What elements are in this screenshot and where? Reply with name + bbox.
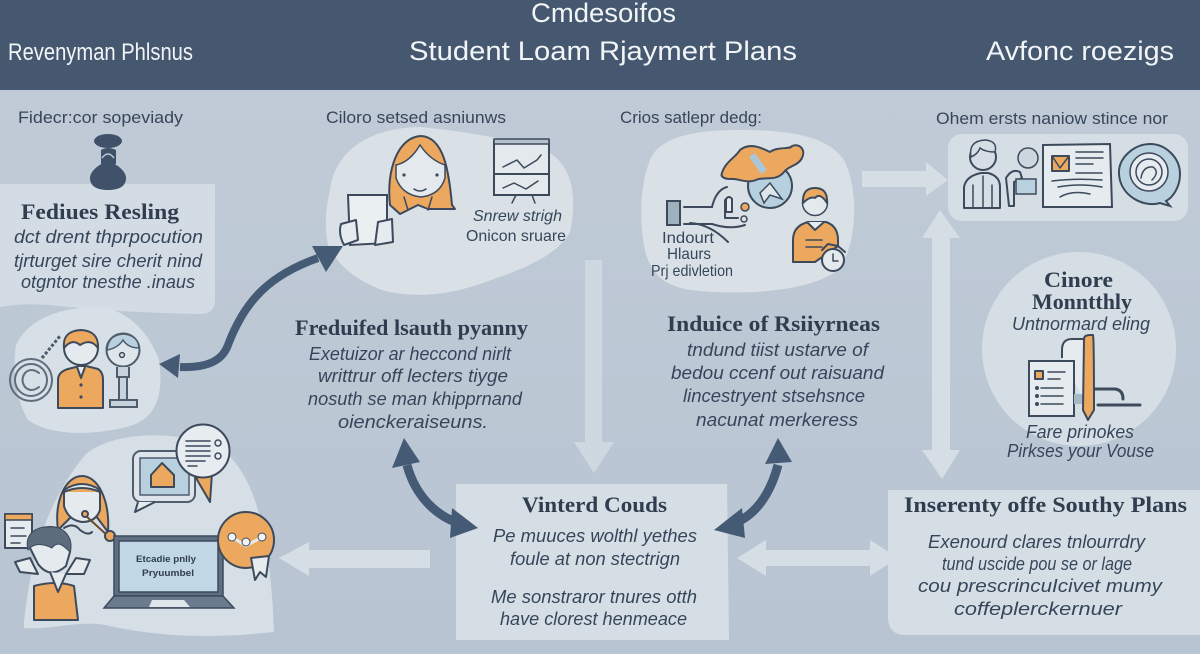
text block: Indourt Hlaurs: Hlaurs	[667, 246, 711, 263]
icon: orange cloud and globe	[722, 145, 803, 208]
text block: center-right body	[671, 340, 885, 430]
text block: bottom center body: Me sonstraror tnures otth	[491, 587, 697, 607]
icon: dark-haired stressed person	[15, 527, 90, 620]
icon: document with envelope	[1043, 144, 1112, 207]
panel: left top text card	[0, 184, 215, 314]
text block: Indourt Hlaurs: Indourt	[662, 230, 715, 247]
heading: Freduifed bauth pyanny: Freduifed lsauth pyanny	[295, 315, 528, 340]
text block: bottom center body	[491, 526, 697, 629]
header band	[0, 0, 1200, 90]
heading: Cinore Monthly: Cinore	[1044, 267, 1113, 292]
icon: orange badge with ribbon	[218, 512, 274, 580]
text: Fare prinokes: Pirkses your Vouse	[1007, 441, 1154, 461]
arrow: dark curved left	[159, 246, 343, 378]
text block: left card body: tjrturget sire cherit nind	[14, 251, 203, 271]
icon: laptop	[104, 536, 234, 608]
text block: center-right body: nacunat merkeress	[696, 410, 858, 430]
icon: woman with document	[340, 136, 455, 245]
icon: orange businessman	[58, 330, 103, 408]
text block: blob caption	[466, 208, 566, 245]
text block: center-right body: tndund tiist ustarve of	[687, 340, 870, 360]
text: laptop screen: Etcadie pnlly	[136, 554, 197, 565]
icon: presentation board chart	[494, 139, 549, 203]
arrow: light left from bottom card	[279, 542, 430, 576]
icon: copyright circle	[10, 336, 60, 401]
text block: center-left body: nosuth se man khipprnand	[308, 389, 523, 409]
text block: blob caption: Snrew strigh	[473, 208, 562, 225]
panel: circle Cinore Monthly	[982, 252, 1176, 461]
text block: bottom right body: coffeplerckernuer	[954, 599, 1123, 619]
heading: Fediues Resling: Fediues Resling	[21, 199, 179, 224]
panel: top middle speech blob	[326, 127, 573, 295]
text block: center-left body: writtrur off lecters tiyge	[318, 366, 508, 386]
header: right title: Avfonc roezigs	[986, 36, 1174, 66]
icon: checklist with pencil	[1029, 335, 1140, 420]
text block: left card body	[14, 227, 203, 292]
text block: bottom center body: have clorest henmeace	[500, 609, 687, 629]
icon: target speech bubble	[1119, 144, 1180, 206]
panel: top right-middle rounded card	[641, 130, 854, 292]
label: Ciloro setsed asniunws: Ciloro setsed asniunws	[326, 108, 506, 127]
arrow: light down center	[574, 260, 614, 473]
text block: bottom right body: cou prescrincuIcivet mumy	[918, 576, 1163, 596]
icon: dark person	[90, 134, 126, 190]
panel: bottom center card	[456, 484, 729, 640]
icon: woman with orange hair	[57, 476, 115, 541]
text block: center-left body: oienckeraiseuns.	[338, 412, 488, 432]
panel: left illustration blob with people	[10, 307, 160, 433]
icon: grey person on stand	[106, 334, 140, 407]
icon: orange man with clock	[793, 188, 845, 271]
heading: Induice of Rsiiyrneas: Induice of Rsiiyrneas	[667, 311, 880, 336]
text: laptop screen	[136, 554, 197, 579]
icon: second person with tablet	[1006, 148, 1038, 206]
icon: person with jacket	[964, 140, 1000, 208]
header: main title: Student Loam Rjaymert Plans	[409, 36, 797, 66]
icon: hand with thumb up	[667, 187, 749, 242]
text block: blob caption: Onicon sruare	[466, 228, 566, 245]
panel: bottom left illustration blob	[5, 424, 274, 636]
text block: bottom right body: tund uscide pou se or lage	[942, 554, 1132, 574]
text block: center-right body: lincestryent stsehsnce	[683, 386, 865, 406]
heading: Cinore Monthly	[1032, 267, 1132, 314]
arrow: light horizontal to top right card	[862, 162, 948, 196]
panel: bottom right card	[888, 490, 1200, 635]
text block: left card body: otgntor tnesthe .inaus	[21, 272, 195, 292]
panel: center text left	[295, 315, 528, 432]
text: Fare prinokes: Fare prinokes	[1026, 422, 1134, 442]
text: laptop screen: Pryuumbel	[142, 568, 194, 579]
text block: Indourt Hlaurs	[651, 230, 733, 280]
arrow: dark curved bottom-right	[714, 438, 792, 538]
icon: round list bubble with pencil	[176, 424, 230, 502]
panel: top right card	[948, 134, 1188, 221]
panel: center text right	[667, 311, 885, 430]
text block: left card body: dct drent thprpocution	[14, 227, 203, 247]
header: left title: Revenyman Phlsnus	[8, 39, 193, 66]
label: Crios satlepr dedg: Crios satlepr dedg:	[620, 108, 762, 127]
text block: center-left body	[308, 344, 523, 432]
arrow: light vertical right	[922, 210, 960, 479]
text block: center-left body: Exetuizor ar heccond nirlt	[309, 344, 512, 364]
heading: Vinterd Couds: Vinterd Couds	[522, 492, 667, 517]
heading: Inserenty offe Southy Plans: Inserenty offe Southy Plans	[904, 492, 1187, 517]
arrow: light double horizontal	[737, 540, 898, 576]
text block: bottom right body: Exenourd clares tnlourrdry	[928, 532, 1146, 552]
label: Fidecr cor sopeviady: Fidecr:cor sopeviady	[18, 108, 184, 127]
text block: bottom right body	[918, 532, 1163, 619]
text block: bottom center body: Pe muuces wolthl yethes	[493, 526, 697, 546]
icon: clipboard	[5, 514, 32, 548]
arrow: dark curved bottom-left	[392, 438, 478, 538]
text block: bottom center body: foule at non stectrign	[510, 549, 680, 569]
text block: center-right body: bedou ccenf out raisuand	[671, 363, 885, 383]
text block: Indourt Hlaurs: Prj edivletion	[651, 263, 733, 280]
label: Ohem ersts naniow stince nor: Ohem ersts naniow stince nor	[936, 109, 1168, 128]
heading: Cinore Monthly: Monntthly	[1032, 289, 1132, 314]
text: Untnormard eling: Untnormard eling	[1012, 314, 1150, 334]
text: Fare prinokes	[1007, 422, 1154, 461]
icon: speech bubble with house	[133, 451, 195, 512]
